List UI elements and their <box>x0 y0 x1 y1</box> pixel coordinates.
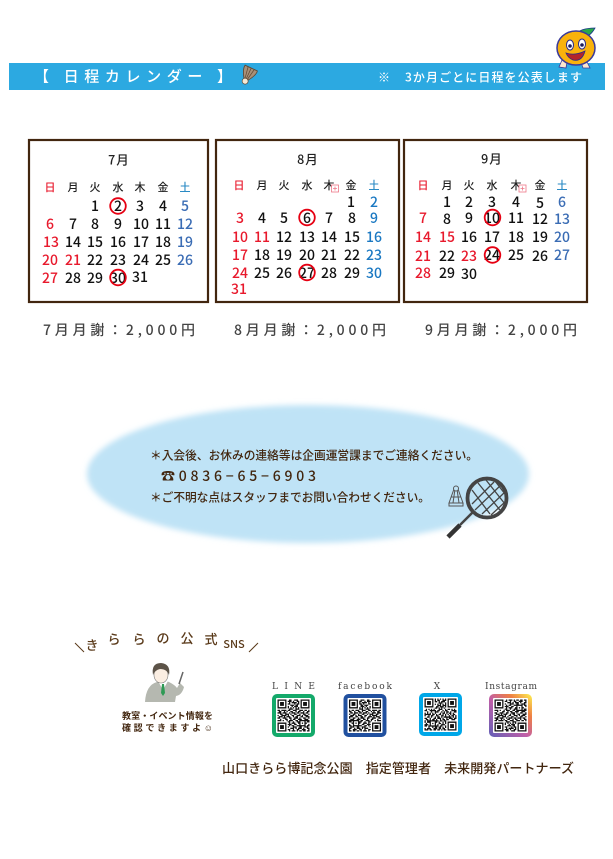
weekday header <box>44 179 190 195</box>
day numbers: 22 <box>439 246 455 266</box>
month title: August: 8月 <box>297 149 319 168</box>
caption: check classes and events: 教室・イベント情報を <box>122 709 213 722</box>
caption: check classes and events <box>122 709 213 734</box>
day numbers: 21 <box>321 245 337 265</box>
weekday header: 月 <box>68 179 78 195</box>
day numbers: 16 <box>366 227 382 247</box>
day numbers: 9 <box>114 214 122 234</box>
heading: schedule calendar: 【 日程カレンダー 】 <box>34 66 232 86</box>
QR: Instagram: Instagram <box>485 682 537 692</box>
day numbers: 22 <box>344 245 360 265</box>
day numbers: 18 <box>254 245 270 265</box>
day numbers: 21 <box>65 250 81 270</box>
weekday header: 日 <box>234 177 244 193</box>
weekday header: 日 <box>44 179 56 195</box>
heading: Kirara official SNS: 式 <box>204 629 218 648</box>
month title: September: 9月 <box>481 148 503 168</box>
day numbers: 29 <box>87 268 103 288</box>
QR: Instagram <box>485 682 537 735</box>
day numbers: 29 <box>344 263 360 283</box>
heading: Kirara official SNS: ら <box>107 629 121 648</box>
day numbers: 10 <box>232 227 248 247</box>
weekday header: 木 <box>134 179 146 195</box>
day numbers: 17 <box>133 232 149 252</box>
day numbers: 6 <box>46 214 54 234</box>
month title: July: 7月 <box>108 150 130 168</box>
day numbers: 19 <box>177 232 193 252</box>
calendar: August <box>216 140 399 302</box>
day numbers: 17 <box>232 245 248 265</box>
weekday header: 月 <box>256 177 268 193</box>
day numbers: 1 <box>443 192 451 212</box>
event circles <box>110 198 126 285</box>
icon: orange mascot <box>557 28 595 68</box>
day numbers: 14 <box>415 227 431 247</box>
weekday header: 水 <box>112 179 124 195</box>
day numbers: 11 <box>155 214 171 234</box>
day numbers: 6 <box>303 208 311 228</box>
day numbers: 20 <box>554 227 570 247</box>
fee: August: 8月月謝：2,000円 <box>234 320 386 340</box>
day numbers: 4 <box>159 196 167 216</box>
weekday header: 火 <box>278 177 290 193</box>
weekday header: 水 <box>486 177 498 193</box>
day numbers: 27 <box>42 268 58 288</box>
QR: LINE: L I N E <box>272 682 315 692</box>
icon: man with pointer <box>145 663 184 702</box>
weekday header: 土 <box>368 177 380 193</box>
day numbers: 5 <box>280 208 288 228</box>
day numbers: 20 <box>299 245 315 265</box>
day numbers: 31 <box>231 279 247 299</box>
day numbers: 28 <box>415 263 431 283</box>
day numbers: 15 <box>87 232 103 252</box>
day numbers: 2 <box>114 196 122 216</box>
day numbers: 7 <box>419 208 427 228</box>
day numbers <box>415 192 570 284</box>
day numbers: 11 <box>254 227 270 247</box>
note: published every three months: ※ <box>378 68 390 86</box>
day numbers: 8 <box>91 214 99 234</box>
day numbers: 16 <box>461 227 477 247</box>
day numbers: 31 <box>132 267 148 287</box>
day numbers: 23 <box>366 245 382 265</box>
heading: Kirara official SNS: ら <box>132 629 146 648</box>
heading: Kirara official SNS: の <box>156 628 170 647</box>
note text: 3か月ごとに日程を公表します <box>405 68 582 86</box>
day numbers: 16 <box>110 232 126 252</box>
day numbers: 11 <box>508 208 524 228</box>
day numbers: 3 <box>136 196 144 216</box>
day numbers: 28 <box>321 263 337 283</box>
heading: Kirara official SNS: SNS <box>223 636 245 652</box>
day numbers: 10 <box>484 208 500 228</box>
day numbers <box>42 196 193 288</box>
day numbers: 12 <box>532 209 548 229</box>
day numbers: 22 <box>87 250 103 270</box>
QR: facebook: facebook <box>338 682 393 692</box>
event circles <box>485 210 500 263</box>
day numbers: 26 <box>276 263 292 283</box>
footer: park manager: 山口きらら博記念公園 指定管理者 未来開発パートナーズ <box>222 758 574 777</box>
weekday header <box>234 177 380 193</box>
weekday header: 金 <box>158 179 168 195</box>
day numbers: 14 <box>321 227 337 247</box>
day numbers: 25 <box>155 250 171 270</box>
weekday header: 火 <box>464 177 474 193</box>
day numbers: 27 <box>554 245 570 265</box>
day numbers: 2 <box>465 192 473 212</box>
weekday header: 木 <box>510 177 522 193</box>
day numbers: 15 <box>344 227 360 247</box>
day numbers: 27 <box>299 263 315 283</box>
QR: X: X <box>434 682 441 692</box>
day numbers: 24 <box>484 245 500 265</box>
day numbers: 12 <box>276 227 292 247</box>
weekday header <box>418 177 568 193</box>
heading: Kirara official SNS <box>75 628 258 654</box>
day numbers: 30 <box>110 268 126 288</box>
day numbers: 1 <box>91 196 99 216</box>
weekday header: 月 <box>442 177 452 193</box>
day numbers: 5 <box>536 193 544 213</box>
calendar: July <box>29 140 208 302</box>
day numbers <box>231 192 382 299</box>
day numbers: 3 <box>488 192 496 212</box>
day numbers: 9 <box>370 208 378 228</box>
weekday header: 木 <box>324 177 334 193</box>
day numbers: 13 <box>299 227 315 247</box>
day numbers: 9 <box>465 208 473 228</box>
day numbers: 14 <box>65 232 81 252</box>
day numbers: 8 <box>348 208 356 228</box>
day numbers: 17 <box>484 227 500 247</box>
calendar: September <box>404 140 587 302</box>
weekday header: 土 <box>180 179 190 195</box>
questions line: ＊ご不明な点はスタッフまでお問い合わせください。 <box>150 488 430 506</box>
day numbers: 10 <box>133 214 149 234</box>
day numbers: 4 <box>512 192 520 212</box>
weekday header: 日 <box>418 177 428 193</box>
heading: Kirara official SNS: き <box>85 635 99 654</box>
day numbers: 1 <box>347 192 355 212</box>
day numbers: 24 <box>133 250 149 270</box>
day numbers: 15 <box>439 227 455 247</box>
day numbers: 13 <box>554 209 570 229</box>
fee: September: 9月月謝：2,000円 <box>425 320 577 340</box>
QR: LINE <box>272 682 315 735</box>
fee: July: 7月月謝：2,000円 <box>43 320 195 340</box>
day numbers: 23 <box>110 250 126 270</box>
day numbers: 30 <box>461 264 477 284</box>
day numbers: 2 <box>370 192 378 212</box>
day numbers: 18 <box>508 227 524 247</box>
phone number: ☎0836−65−6903 <box>161 466 316 486</box>
day numbers: 23 <box>461 246 477 266</box>
weekday header: 土 <box>556 177 568 193</box>
day numbers: 30 <box>366 263 382 283</box>
day numbers: 25 <box>508 245 524 265</box>
caption second line: 確認できますよ☺ <box>122 721 213 734</box>
day numbers: 26 <box>177 250 193 270</box>
weekday header: 火 <box>90 179 100 195</box>
day numbers: 24 <box>232 263 248 283</box>
day numbers: 21 <box>415 246 431 266</box>
panel: contact ellipse <box>87 405 529 543</box>
heading: Kirara official SNS: 公 <box>180 628 194 647</box>
event circles <box>299 210 315 280</box>
day numbers: 3 <box>236 208 244 228</box>
day numbers: 29 <box>439 263 455 283</box>
icon: shuttlecock <box>238 65 258 87</box>
day numbers: 19 <box>532 227 548 247</box>
day numbers: 19 <box>276 245 292 265</box>
QR: X <box>421 682 460 734</box>
day numbers: 7 <box>69 214 77 234</box>
day numbers: 13 <box>43 232 59 252</box>
day numbers: 20 <box>42 250 58 270</box>
day numbers: 6 <box>558 192 566 212</box>
header band <box>9 63 605 90</box>
QR: facebook <box>338 682 393 735</box>
day numbers: 4 <box>258 208 266 228</box>
weekday header: 金 <box>346 177 356 193</box>
day numbers: 7 <box>325 208 333 228</box>
day numbers: 5 <box>181 196 189 216</box>
icon: shuttlecock outline <box>449 486 463 506</box>
small plus marker <box>519 185 526 192</box>
day numbers: 26 <box>532 246 548 266</box>
weekday header: 金 <box>534 177 546 193</box>
small plus marker <box>332 185 338 192</box>
weekday header: 水 <box>302 177 312 193</box>
day numbers: 8 <box>443 209 451 229</box>
contact line: ＊入会後、お休みの連絡等は企画運営課までご連絡ください。 <box>150 446 478 464</box>
icon: racket <box>448 478 506 537</box>
day numbers: 12 <box>177 214 193 234</box>
day numbers: 18 <box>155 232 171 252</box>
day numbers: 28 <box>65 268 81 288</box>
day numbers: 25 <box>254 263 270 283</box>
